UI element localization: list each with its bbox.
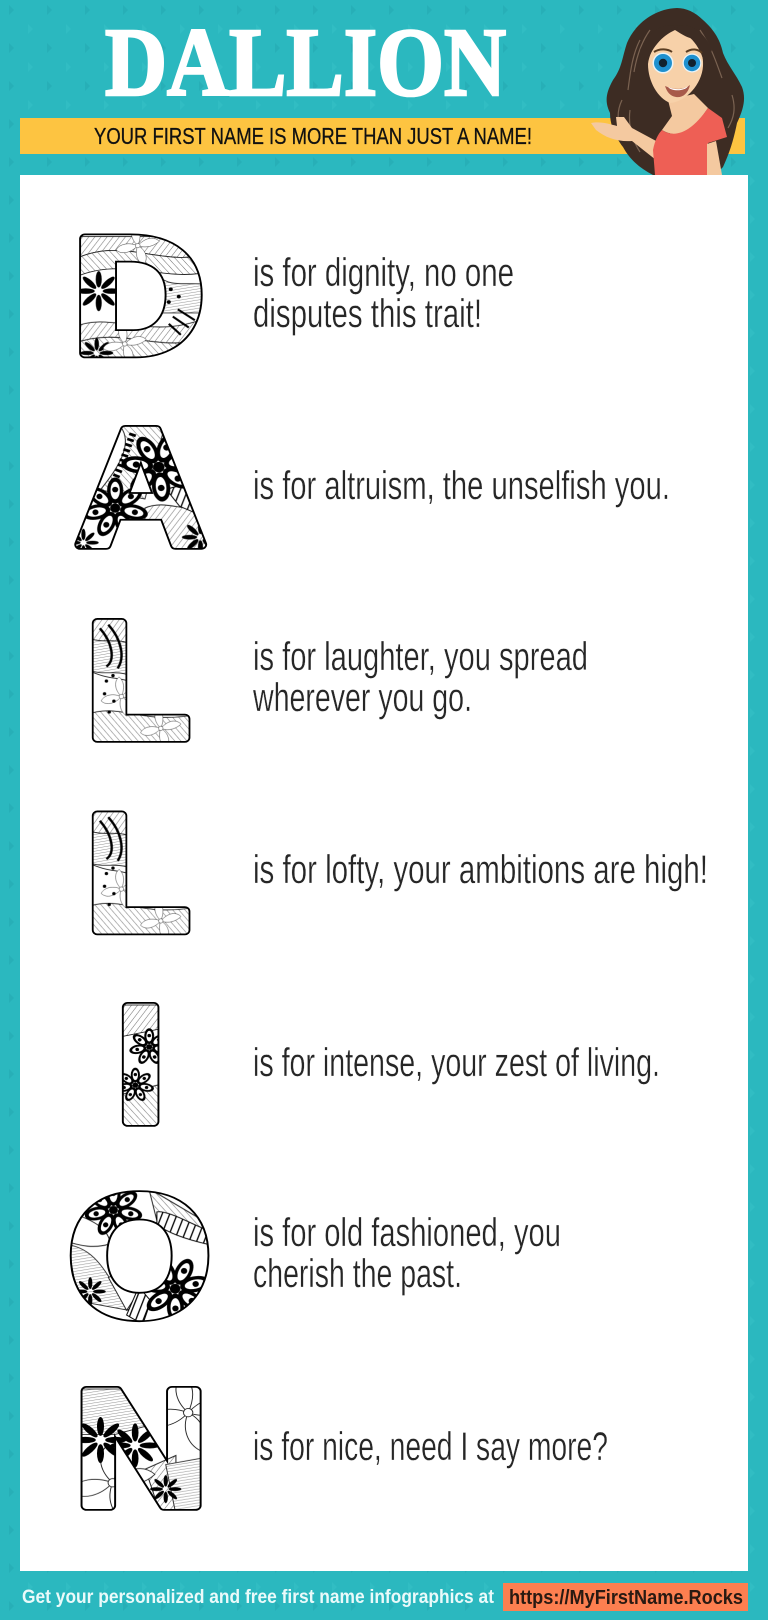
letter A illustration: A bbox=[76, 394, 206, 580]
letter O illustration: O bbox=[68, 1160, 211, 1352]
letter N illustration: N bbox=[74, 1356, 208, 1541]
text: D line: is for dignity, no one bbox=[253, 251, 514, 295]
footer url badge: https://MyFirstName.Rocks bbox=[509, 1587, 743, 1609]
letter L illustration: L bbox=[86, 587, 190, 773]
text: D line: disputes this trait! bbox=[253, 292, 482, 336]
letter D illustration: D bbox=[73, 203, 205, 388]
neck and chest bbox=[662, 94, 708, 134]
icon: cartoon woman presenter bbox=[591, 8, 744, 175]
letter A illustration: A bbox=[76, 394, 206, 580]
shirt bbox=[653, 108, 727, 175]
title: DALLION bbox=[105, 9, 506, 116]
hair bbox=[607, 8, 744, 175]
second letter L illustration: L bbox=[86, 779, 190, 965]
mouth bbox=[665, 85, 690, 97]
text: O line bbox=[253, 1211, 561, 1296]
text: L line bbox=[252, 635, 588, 720]
arm and hand bbox=[591, 117, 658, 160]
letter D illustration: D bbox=[73, 203, 205, 388]
face bbox=[648, 30, 703, 103]
letter I illustration: I bbox=[116, 971, 166, 1157]
tagline banner: YOUR FIRST NAME IS MORE THAN JUST A NAME! bbox=[94, 123, 532, 149]
text: D line bbox=[253, 251, 514, 336]
brows bbox=[654, 49, 702, 53]
hair parting over forehead bbox=[640, 25, 712, 66]
letter L illustration: L bbox=[86, 587, 190, 773]
second letter L illustration: L bbox=[86, 779, 190, 965]
text: L line: is for laughter, you spread bbox=[253, 635, 588, 679]
letter N illustration: N bbox=[74, 1356, 208, 1541]
footer call to action: Get your personalized and free first name infographics at bbox=[22, 1587, 495, 1608]
eyes bbox=[652, 52, 674, 74]
text: N line: is for nice, need I say more? bbox=[253, 1425, 608, 1469]
letter O illustration: O bbox=[68, 1160, 211, 1352]
tagline banner bbox=[20, 118, 745, 154]
text: O line: cherish the past. bbox=[253, 1252, 462, 1296]
text: L line: wherever you go. bbox=[252, 676, 472, 720]
right arm bbox=[707, 141, 722, 175]
text: O line: is for old fashioned, you bbox=[253, 1211, 561, 1255]
letter I illustration: I bbox=[116, 971, 166, 1157]
